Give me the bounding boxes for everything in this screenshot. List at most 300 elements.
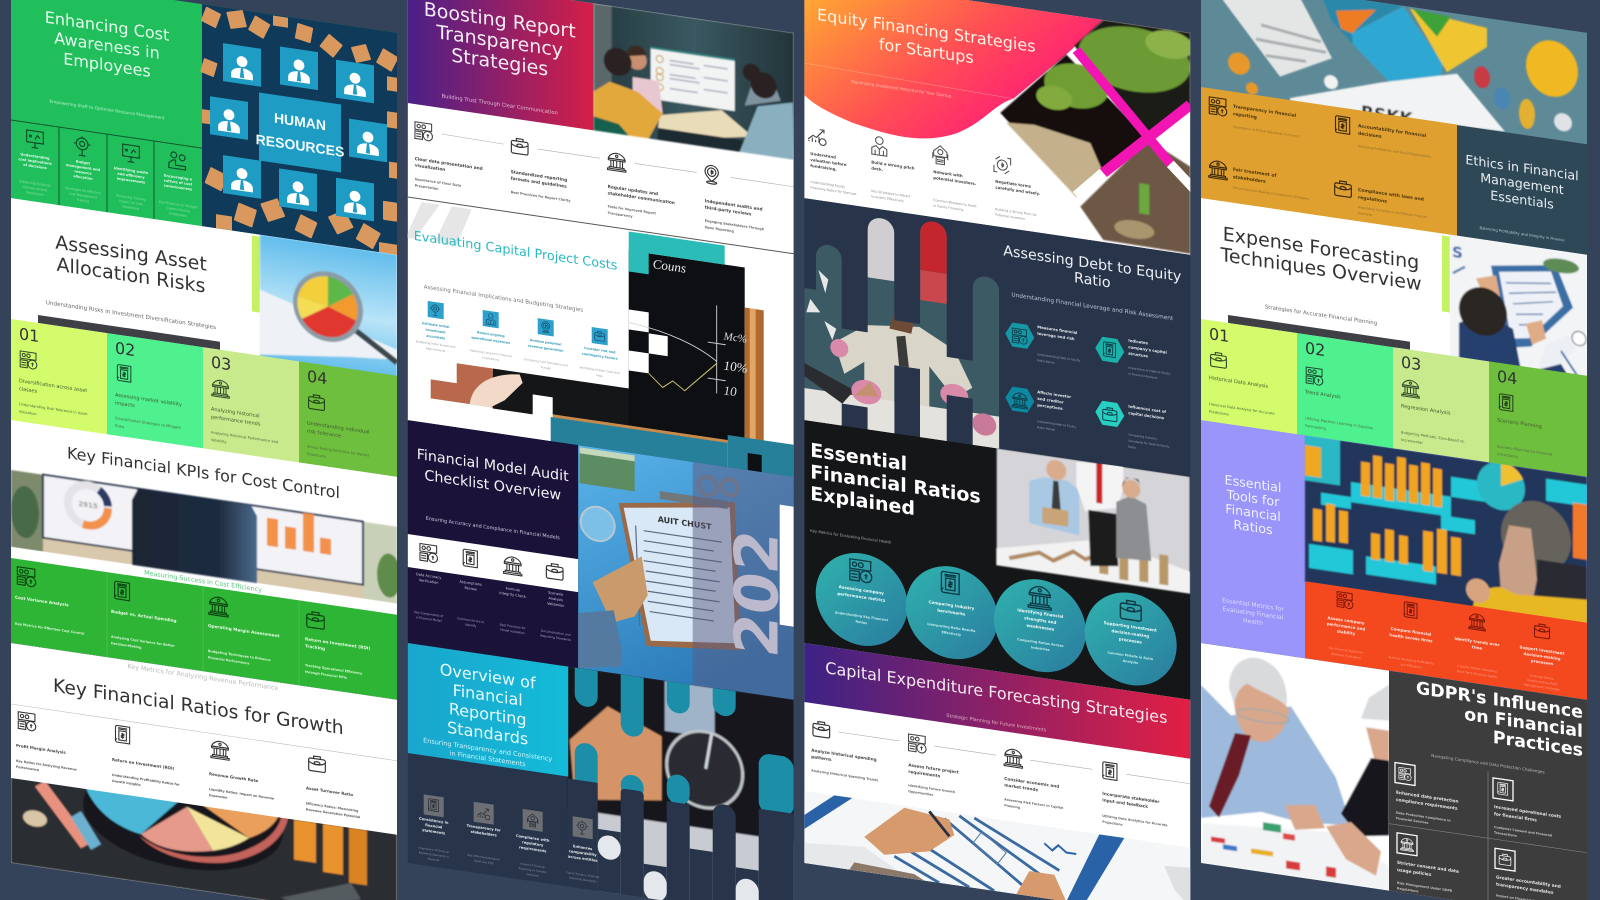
item row: Network with [933, 169, 963, 178]
teal circle items: weaknesses [1026, 623, 1055, 632]
item grid: Training [76, 198, 89, 203]
item row: Investors Effectively [871, 194, 904, 203]
teal circle items: Industries [1031, 645, 1050, 652]
title block: Reporting [449, 699, 527, 729]
item grid: allocation [73, 174, 93, 181]
item row: Reporting Standards [569, 876, 597, 884]
image: chalkboard with pixel cut-outs: 10 [724, 383, 737, 399]
image: person filling clipboard: S [1452, 243, 1463, 262]
item row: investment [426, 328, 446, 335]
item row: Revenue Generation Potential [306, 807, 360, 819]
title: Techniques Overview [1220, 243, 1421, 295]
panel: Financial Model Audit Checklist slide [408, 420, 794, 700]
item grid: Employees [170, 211, 187, 218]
orange items panel: Tools for Analyzing Profitability [1388, 655, 1434, 666]
panel: Capital Expenditure Forecasting slide [804, 643, 1190, 900]
item row: Identifying Future Growth [908, 783, 955, 794]
title: Ratio [1074, 270, 1111, 292]
item row: Tools for Improved Report [608, 204, 656, 215]
item row: formats and guidelines [511, 176, 567, 190]
item row: Key Strategies to Attract [871, 189, 910, 199]
item row: contingency factors [582, 352, 618, 361]
item grid: Encouraging a [164, 174, 192, 182]
item row: Assessing Risk Factors in Capital [1004, 797, 1063, 810]
green KPI panel: Cost Variance Analysis [15, 595, 69, 608]
teal circle items: Identifying financial [1017, 607, 1063, 619]
orange items panel: Management Strategies [1524, 683, 1560, 692]
item grid: of decisions [23, 163, 47, 170]
panel: Key Financial Ratios for Growth slide [11, 643, 397, 900]
item row: Importance of Financial [419, 847, 449, 854]
content panel: on Financial [1464, 705, 1583, 742]
teal circle items: Common Pitfalls in Ratio [1108, 651, 1153, 661]
numbered panels: 04 [1497, 367, 1517, 388]
item row: Expansion [209, 793, 228, 800]
hexagon items: Ratio Trends [1037, 425, 1056, 432]
item row: Independent audits and [705, 199, 763, 213]
item row: Estimate initial [422, 321, 449, 329]
item row: Consistency in [419, 817, 448, 825]
item labels: Data Accuracy [416, 572, 441, 580]
panel: GDPR's Influence slide [1201, 643, 1587, 900]
dark accent bar [1228, 315, 1410, 350]
content panel: Practices [1493, 728, 1583, 761]
hexagon items: and creditor [1037, 396, 1064, 405]
image: chalkboard with pixel cut-outs: 10% [724, 358, 748, 376]
item row: stakeholder communication [608, 190, 675, 206]
item grid: Impact on Cost [119, 199, 143, 206]
subtitle: Understanding Risks in Investment Diversification Strategies [46, 300, 216, 331]
teal circle items: decision-making [1111, 628, 1149, 639]
numbered panels: Forecasting [1305, 424, 1326, 431]
hexagon items: leverage and risk [1037, 331, 1075, 341]
item row: GAAP and IFRS [474, 859, 494, 865]
title block: Financial [453, 681, 523, 710]
item labels: a Financial Model [416, 615, 442, 623]
image: presenter and dashboard screen [11, 470, 401, 604]
item grid: Control Among [166, 206, 190, 213]
item row: valuation before [810, 157, 847, 167]
orange items panel: Identify trends over [1454, 636, 1500, 647]
numbered panels: Utilizing Machine Learning in Expense [1305, 416, 1373, 430]
orange items panel: stakeholders [1233, 174, 1266, 185]
item row: Assessing Long-term Financial [470, 348, 512, 358]
item row: requirements [908, 769, 941, 779]
item row [16, 711, 360, 819]
hexagon items [1005, 320, 1171, 455]
green KPI panel: Tracking Operational Efficiency [305, 663, 362, 676]
image: 3D pie, keyboard and coins [1223, 0, 1578, 154]
subtitle: Strategies for Accurate Financial Planning [1265, 304, 1377, 327]
green KPI panel: Budget vs. Actual Spending [111, 609, 177, 623]
item grid: management and [66, 163, 101, 172]
orange items panel: reporting [1233, 111, 1257, 121]
orange items panel: Key Financial Ratios for [1329, 646, 1363, 655]
hexagon items: perceptions [1037, 402, 1063, 411]
teal circle items: Comparing Ratios Across [1017, 637, 1063, 648]
teal circle items: strengths and [1024, 615, 1057, 625]
content panel: usage policies [1397, 867, 1432, 878]
green KPI panel: Return on Investment (ROI) [305, 636, 370, 651]
hexagon items: Measures financial [1037, 324, 1077, 335]
numbered panels: Understanding Risk Tolerance in Asset [19, 402, 88, 416]
numbered panels: risk tolerance [307, 429, 341, 440]
title: Ratios [1233, 518, 1273, 539]
content panel: Navigating Compliance and Data Protection Challenges [1431, 753, 1545, 775]
item row: Reporting Standards in [419, 850, 449, 859]
panel: Essential Financial Ratios slide [804, 418, 1190, 700]
panel: Ethics in Financial Management slide [1201, 0, 1587, 256]
item row: Incorporate stakeholder [1102, 791, 1159, 804]
numbered panels: Scenario Planning [1497, 418, 1542, 430]
item row: in Equity Financing [933, 203, 963, 212]
content panel: Enhanced data protection [1396, 791, 1459, 805]
item row: Transparency [608, 211, 633, 219]
item row: potential investors. [933, 175, 977, 186]
content panel: Increased operational costs [1494, 805, 1561, 820]
content panel: compliance requirements [1396, 797, 1458, 812]
item row: Clear data presentation and [415, 157, 483, 172]
item row: carefully and wisely. [995, 185, 1041, 196]
numbered panels: Understanding individual [307, 421, 370, 436]
item grid: Strategies for Effective [65, 186, 101, 195]
title block: Standards [447, 718, 528, 749]
item row: requirements [519, 845, 546, 853]
item row: Reporting on Investor [519, 866, 548, 874]
title: Essential [1225, 473, 1281, 496]
item row: Importance of Clear Data [415, 177, 461, 188]
column 3 of slides [804, 0, 1194, 900]
item row: Standardized reporting [511, 170, 567, 183]
numbered panels: 03 [211, 352, 231, 374]
item grid: and efficiency [117, 172, 145, 180]
orange items panel: Compare financial [1391, 626, 1431, 637]
item row: Compliance with [516, 834, 549, 843]
content panel: Stricter consent and data [1397, 861, 1459, 875]
item row [415, 122, 794, 243]
item row: Understanding Equity [810, 180, 845, 189]
hexagon items: company's capital [1128, 344, 1167, 355]
title: Checklist Overview [424, 468, 561, 504]
numbered panels: impacts [115, 400, 135, 409]
panel: Key Financial KPIs slide [11, 420, 401, 700]
item labels: Identify [465, 622, 477, 628]
numbered panels: Predictions [1209, 410, 1229, 417]
title: Financial Ratios [810, 460, 981, 508]
item row: Asset Turnover Ratio [306, 785, 353, 797]
item row: Growth Insights [112, 779, 141, 787]
content panel: Transactions [1494, 831, 1517, 838]
item grid [11, 120, 202, 227]
column 1 of slides [11, 0, 401, 900]
orange items panel: performance and [1327, 621, 1365, 632]
subtitle: Understanding Financial Leverage and Risk Assessment [1011, 292, 1174, 322]
content panel: for financial firms [1494, 811, 1537, 824]
orange items panel: Business Evaluation [1331, 652, 1361, 660]
green KPI panel: Key Metrics for Effective Cost Control [15, 622, 84, 636]
item grid: improvements [117, 177, 145, 185]
content panel: Regulations [1397, 886, 1418, 893]
item labels: Integrity Check [499, 591, 527, 599]
numbered panels: 01 [1209, 324, 1229, 346]
title block: Building Trust Through Clear Communication [442, 94, 558, 117]
teal circle items: Interpreting Ratio Results [927, 622, 975, 633]
title block [408, 643, 568, 777]
orange items panel: Transparency in financial [1233, 105, 1296, 119]
panel: Essential Tools for Financial Ratios slide [1201, 418, 1587, 700]
item labels: Documentation and [541, 629, 570, 637]
item row: Presentation [415, 184, 439, 191]
item row: Business [428, 857, 440, 862]
orange items panel: decision-making [1524, 651, 1561, 661]
numbered panels: Analyzing historical [211, 406, 260, 420]
item row: Transparency for [467, 824, 501, 833]
numbered panels: 04 [307, 367, 327, 388]
orange items panel: Accountability for financial [1358, 124, 1426, 139]
item labels: Verification [419, 578, 438, 585]
item row: comparability [569, 849, 597, 857]
orange items panel: Importance of Ethical Standards in Finance [1233, 125, 1299, 138]
item row: Utilizing Data Analytics for Accurate [1102, 814, 1168, 827]
subtitle: Health [1243, 617, 1263, 627]
item row: across entities [568, 855, 598, 863]
title panel: Balancing Profitability and Integrity in Finance [1480, 226, 1565, 243]
item row: Projections [1102, 820, 1123, 827]
hexagon items: capital decisions [1128, 410, 1165, 420]
subtitle: Ensuring Accuracy and Compliance in Financial Models [426, 516, 560, 541]
item row [811, 719, 1190, 837]
image: person filling clipboard [1450, 235, 1587, 380]
orange items panel: Liquidity Ratios: Assessing [1457, 664, 1497, 673]
item labels: Scenario [548, 591, 563, 597]
numbered panels: Diversification Strategies to Mitigate [115, 416, 181, 430]
title block [408, 0, 594, 130]
panel: Expense Forecasting Techniques slide [1201, 198, 1587, 478]
image: business team reviewing documents [996, 446, 1190, 594]
subtitle: Evaluating Financial [1223, 606, 1284, 622]
image: 3D pie chart [11, 778, 397, 900]
image: audit checklist clipboard: 202 [723, 526, 793, 661]
item grid: cost implications [18, 157, 52, 166]
numbered panels: Assessing market volatility [115, 392, 182, 408]
teal circle items [816, 547, 1177, 692]
item row: financial [425, 823, 442, 830]
item grid: Awareness [123, 204, 140, 211]
item grid: Literacy Among [23, 185, 47, 192]
hexagon items: Importance of Debt to Equity [1128, 366, 1170, 376]
item row: Open Reporting [705, 225, 735, 234]
item row [808, 126, 1041, 223]
content panel: transparency mandates [1496, 882, 1554, 896]
panel: Equity Financing Strategies slide [804, 0, 1194, 256]
item row: Engaging Stakeholders Through [705, 219, 764, 231]
image: hand with magnifier in pill cut-outs [568, 667, 794, 900]
title: Essential [810, 438, 907, 476]
orange items panel: Assess company [1328, 615, 1364, 626]
green KPI panel: Tracking [305, 643, 325, 651]
item row: Key Differences Between [467, 854, 500, 862]
item row: Consider economic and [1004, 776, 1059, 789]
item row: Negotiate terms [995, 179, 1031, 189]
item row [419, 794, 599, 887]
orange items panel: and Efficiency [1401, 662, 1422, 669]
item row: Analyze historical spending [811, 748, 877, 762]
cut-out bars [568, 667, 794, 900]
subtitle: Maximizing Investment Potential for Your Startup [851, 79, 952, 99]
white strip right of presenter [257, 583, 397, 604]
title block: in Financial Statements [450, 749, 526, 768]
image: two men reviewing charts [1201, 643, 1389, 891]
item row: deck. [871, 165, 884, 172]
item row: Performance [16, 765, 40, 772]
overline: Key Metrics for Analyzing Revenue Performance [128, 663, 279, 692]
numbered panels: Historical Data Analysis for Accurate [1209, 402, 1275, 416]
green KPI panel [11, 558, 397, 700]
orange items panel: Leverage Ratios: [1529, 673, 1555, 681]
item row: Opportunities [908, 789, 933, 797]
subtitle: Empowering Staff to Optimize Resource Management [49, 99, 165, 122]
title: for Startups [879, 35, 974, 67]
title block: Ensuring Transparency and Consistency [423, 736, 552, 763]
item row: Build a strong pitch [871, 159, 915, 171]
item labels [414, 571, 571, 642]
item row: Enhances [573, 844, 592, 851]
gradient header: Capital Expenditure Forecasting Strategies [825, 658, 1167, 727]
item row: fundraising. [810, 163, 837, 172]
item row [416, 299, 620, 381]
teal circle items: Comparing industry [928, 599, 974, 611]
teal circle items: processes [1119, 636, 1142, 645]
item row: stakeholders [471, 830, 497, 838]
title: Tools for [1226, 488, 1280, 511]
hexagon items: Indicates [1128, 338, 1148, 346]
hexagon items: structure [1128, 351, 1149, 359]
orange items panel [1305, 581, 1587, 700]
teal circle items: Assessing company [839, 584, 884, 596]
title: Awareness in [54, 28, 160, 63]
title: Evaluating Capital Project Costs [414, 229, 618, 274]
item labels: Reporting Standards [540, 634, 571, 642]
green KPI panel: Financial Performance [208, 655, 250, 666]
green KPI panel: Decision-Making [111, 641, 142, 650]
orange items panel: Understanding Debt [1527, 678, 1558, 686]
green KPI panel: through Financial KPIs [305, 670, 347, 680]
subtitle: Assessing Financial Implications and Budgeting Strategies [424, 284, 583, 314]
orange items panel: Compliance with laws and [1358, 188, 1424, 203]
image: audit checklist clipboard: AUIT CHUST [658, 515, 712, 532]
title: Assessing Asset [55, 231, 207, 276]
item row: Analyzing Historical Spending Trends [811, 769, 878, 782]
item row: Financing Basics for Startups [810, 185, 857, 196]
item row: market trends [1004, 782, 1038, 792]
item row: accurately [426, 334, 446, 341]
numbered panels: 03 [1401, 352, 1421, 374]
item grid: Cost Management [69, 192, 98, 200]
title block: Transparency [435, 20, 563, 62]
numbered panels: Uncertainty [1497, 452, 1519, 459]
hexagon items: in Financial Analysis [1128, 372, 1158, 380]
item grid: culture of cost [164, 178, 193, 187]
accent stripe [252, 235, 260, 313]
title: Enhancing Cost [45, 8, 169, 45]
numbered panels: classes [19, 386, 37, 395]
item row: Implications [482, 355, 500, 362]
hexagon items: Interpreting Debt to Equity [1037, 419, 1076, 429]
teal circle items: Understanding Key Financial [835, 610, 888, 622]
numbered panels: 02 [1305, 338, 1325, 360]
gradient header: Strategic Planning for Future Investments [946, 713, 1047, 734]
item grid: Measuring Training [116, 194, 146, 202]
item row: Fees [597, 373, 603, 378]
title panel: Essentials [1490, 189, 1554, 213]
item row: Budgeting Initial Investment [416, 339, 455, 349]
teal circle items: Analysis [1123, 659, 1138, 665]
image: chalkboard with pixel cut-outs [430, 232, 794, 477]
subtitle: Essential Metrics for [1222, 597, 1284, 613]
orange items panel: Short-Term Financial Health [1457, 669, 1497, 679]
teal circle items: Effectively [942, 630, 962, 637]
title: Employees [63, 49, 151, 81]
gradient header [804, 643, 1190, 759]
item labels: Common Errors to [457, 616, 484, 624]
item row: Best Practices for Report Clarity [511, 190, 571, 203]
title: Expense Forecasting [1223, 222, 1419, 274]
item row: Future Trends in Financial [566, 871, 599, 879]
item row: Planning [1004, 803, 1021, 810]
title panel: Ethics in Financial [1465, 153, 1579, 184]
item row: Common Mistakes to Avoid [933, 198, 976, 208]
image: hands on blueprint [804, 791, 1190, 900]
orange items panel: time [1472, 644, 1482, 651]
panel: Overview of Financial Reporting Standards slide [408, 643, 794, 900]
item row: Profit Margin Analysis [16, 743, 66, 755]
item row: regulatory [522, 840, 544, 848]
content panel: GDPR's Influence [1416, 679, 1583, 723]
white icon strip [408, 534, 578, 592]
teal circle items: benchmarks [937, 608, 966, 617]
item row: Building a Strong Pitch for [995, 207, 1037, 217]
content panel: Customer Consent and Financial [1494, 825, 1552, 838]
image: human resources tiles: HUMAN [274, 110, 326, 133]
orange items panel: stability [1337, 628, 1356, 636]
numbered panels: Scenario Planning for Financial [1497, 445, 1552, 457]
image: human resources tiles [200, 4, 399, 257]
item labels: Key Components of [414, 610, 443, 618]
item labels: Assumptions [460, 580, 482, 587]
item row: Requirements [426, 346, 446, 353]
item row: Comparing Cost Estimation and [524, 357, 568, 368]
title: Explained [810, 482, 915, 520]
image: audit checklist clipboard [578, 445, 794, 700]
item labels: Model Validation [500, 628, 525, 635]
item row: Actuals [541, 365, 551, 371]
image: chalkboard with pixel cut-outs: Couns [653, 256, 686, 276]
strap line: Measuring Success in Cost Efficiency [144, 569, 262, 594]
item row: visualization [415, 163, 445, 173]
numbered panels: Historical Data Analysis [1209, 375, 1268, 390]
item grid: resource [74, 169, 92, 176]
item row: Decisions [526, 872, 540, 878]
item grid: Key Practices for Budget [159, 200, 197, 209]
panel: Evaluating Capital Project Costs slide [406, 198, 794, 478]
orange items panel: health across firms [1389, 632, 1433, 644]
numbered panels: Allocation [19, 410, 37, 416]
content panel: Financial Services [1396, 816, 1429, 825]
item row: Key Ratios for Analyzing Revenue [16, 759, 77, 772]
subtitle: Key Metrics for Evaluating Financial Health [810, 528, 892, 545]
hexagon items: Affects investor [1037, 389, 1071, 399]
dark accent bar [38, 315, 220, 350]
